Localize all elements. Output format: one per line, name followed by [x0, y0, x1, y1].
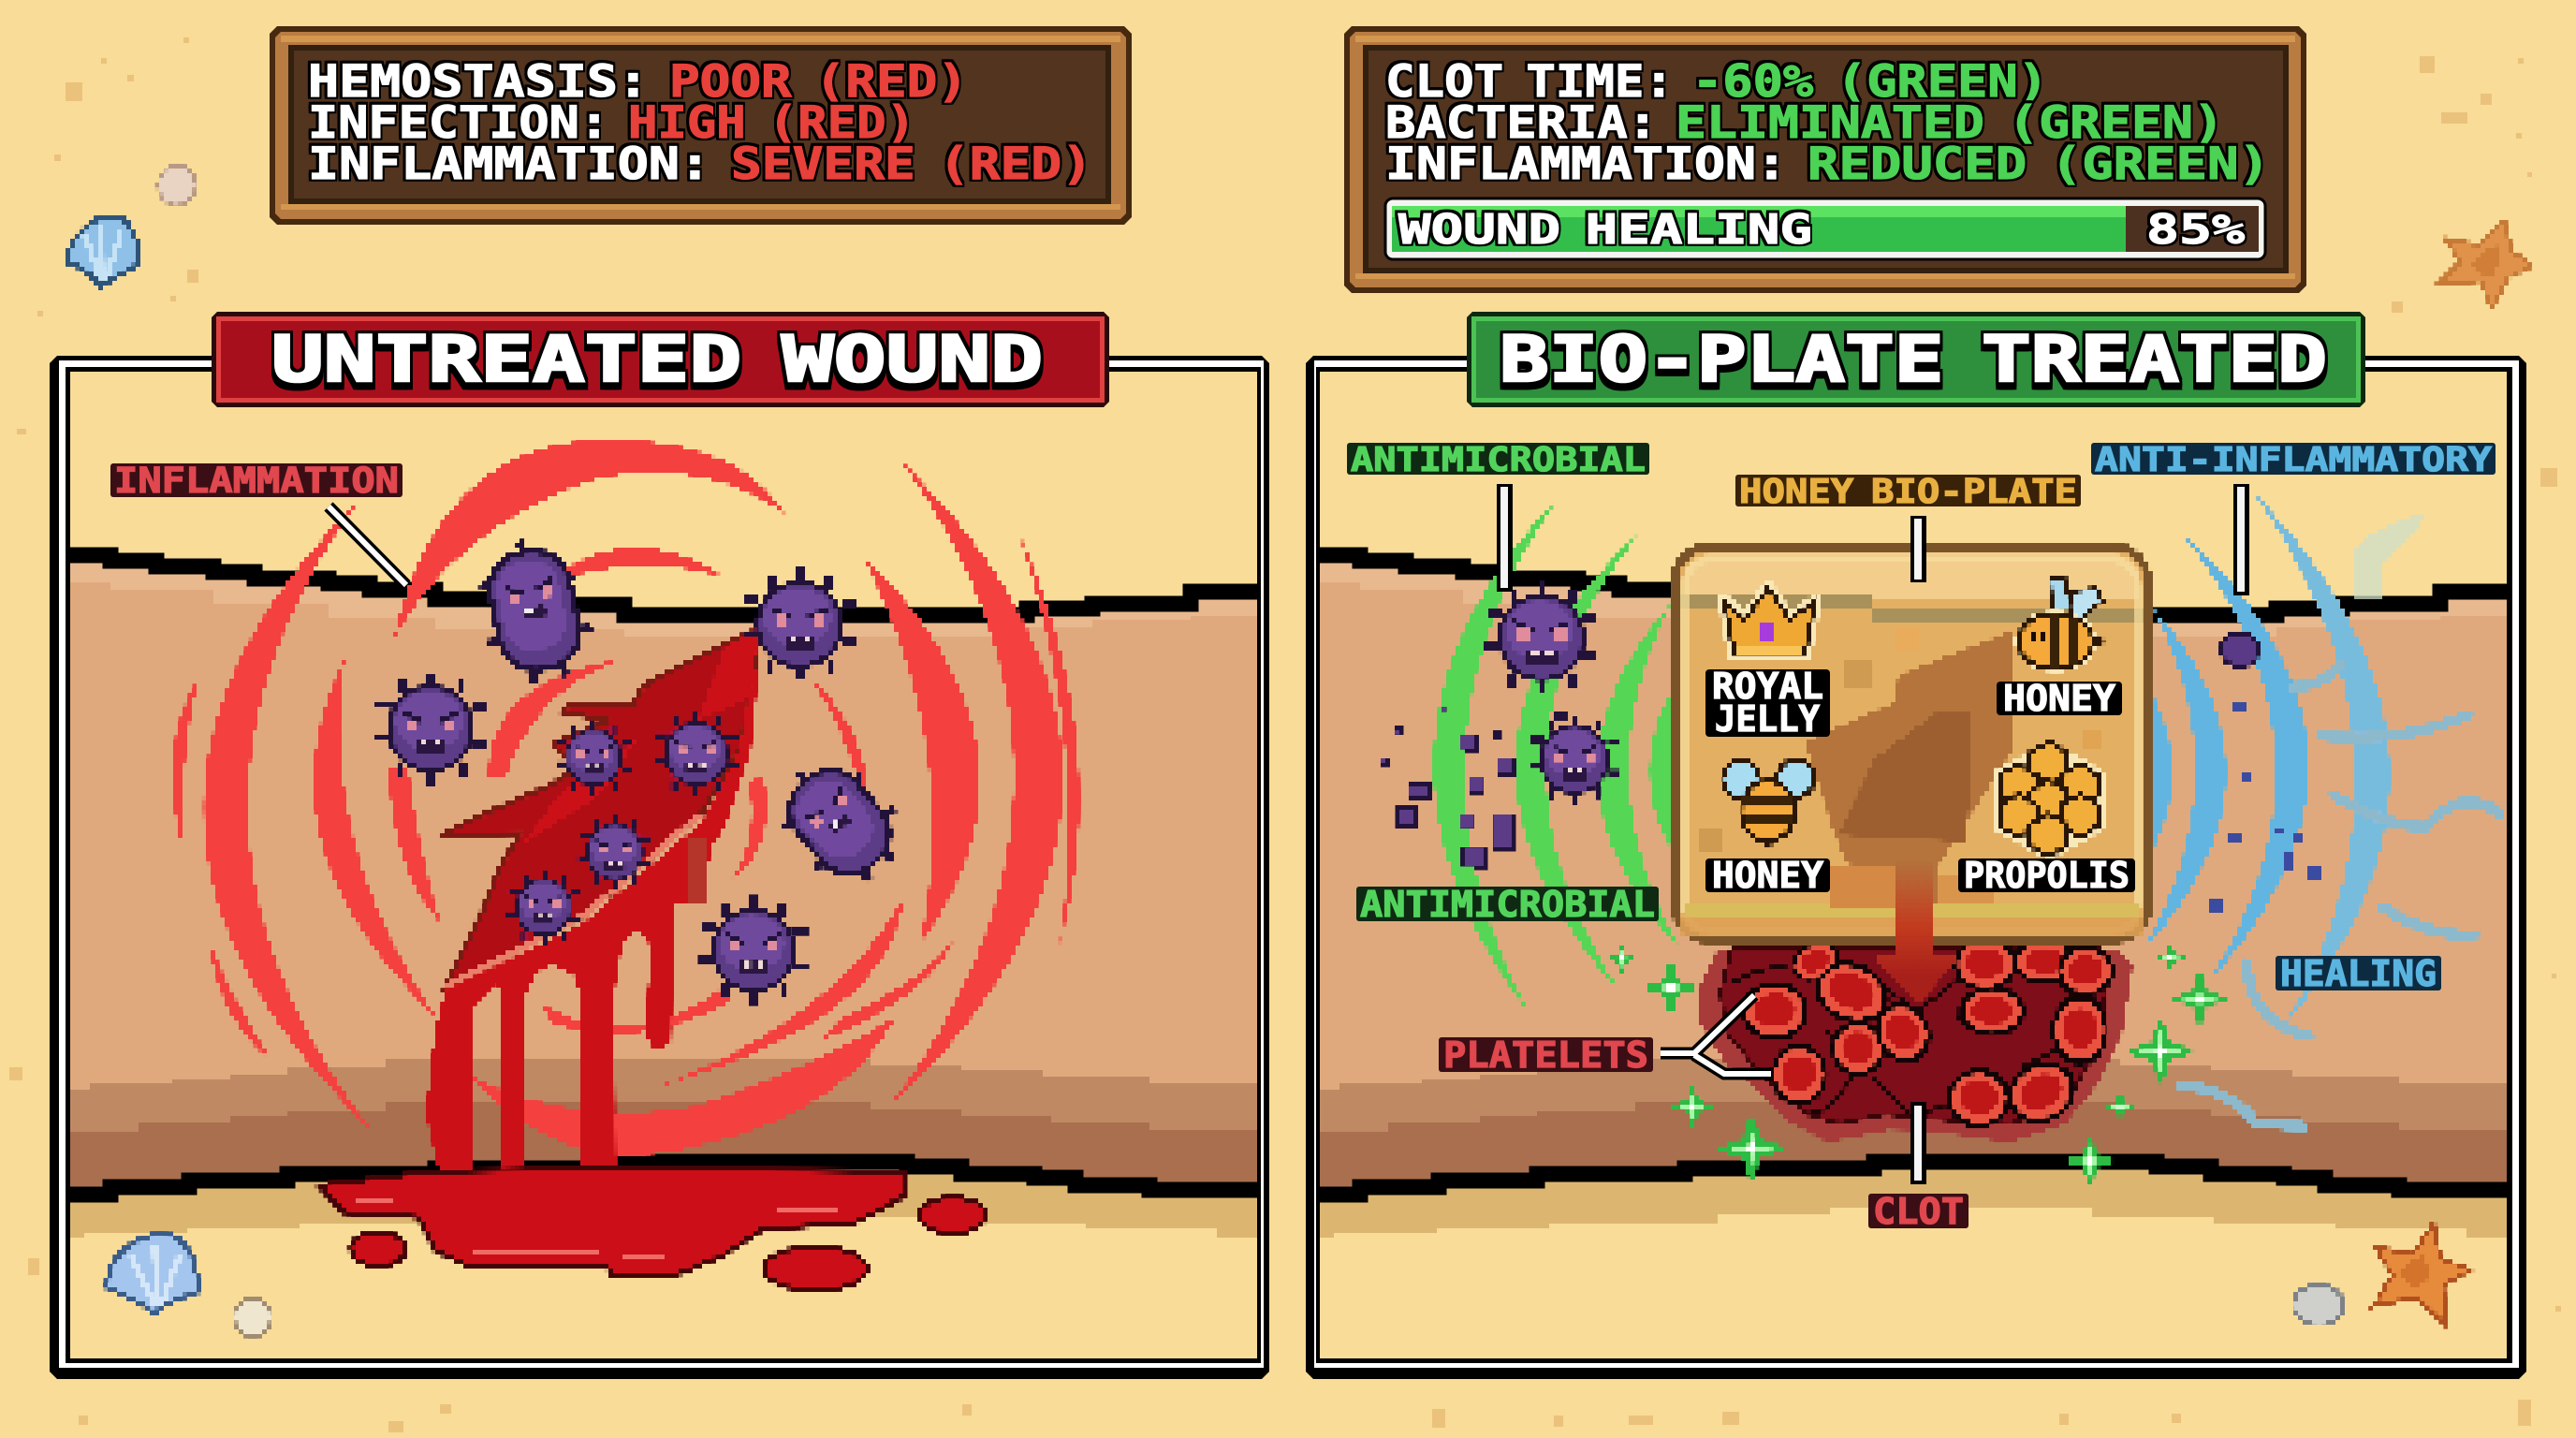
leader: inflammation inner	[329, 506, 406, 585]
stat line: hemostasis: HEMOSTASIS:	[308, 56, 649, 108]
label: clot: CLOT	[1873, 1191, 1964, 1232]
blue fragments	[2211, 704, 2321, 912]
label: antimicrobial bottom: ANTIMICROBIAL	[1360, 884, 1655, 925]
bacteria fragments	[1381, 707, 1567, 867]
stat line: inflammation	[1385, 139, 2270, 190]
label: honey bio-plate: HONEY BIO-PLATE	[1739, 473, 2077, 511]
leader: platelets	[1661, 995, 1771, 1074]
icon: starfish top right	[2437, 220, 2532, 307]
stat line: bacteria: ELIMINATED (GREEN)	[1676, 97, 2224, 149]
leader: top antimicrobial inner	[1500, 487, 1508, 588]
blood drops	[351, 1197, 986, 1290]
stat line: clot time: -60% (GREEN)	[1692, 56, 2048, 108]
panel: bio-plate treated stats	[1344, 26, 2306, 293]
icon: pebble bottom left	[234, 1299, 271, 1336]
skin cross-section: left	[70, 548, 1257, 1238]
label: propolis: PROPOLIS	[1964, 855, 2130, 896]
anti-inflammatory blue waves	[2144, 532, 2308, 981]
stat line: bacteria	[1385, 97, 2224, 149]
illustration: right panel art	[1381, 495, 2499, 1325]
label: royal jelly	[1705, 666, 1830, 740]
outer beach decorations	[67, 166, 2532, 307]
leader: clot	[1910, 1102, 1926, 1184]
panel: untreated wound frame	[50, 356, 1269, 1379]
leader: inflammation	[329, 506, 406, 585]
icon: propolis honeycomb	[1992, 740, 2106, 861]
label: antimicrobial top: ANTIMICROBIAL	[1351, 441, 1646, 479]
title banner: bio-plate treated: BIO-PLATE TREATED	[1500, 323, 2327, 397]
icon: pebble top left	[158, 166, 196, 205]
red blood cells	[1744, 937, 2112, 1131]
blood pool	[320, 1168, 903, 1276]
leader: anti-inflammatory	[2233, 484, 2249, 595]
title banner: untreated wound: UNTREATED WOUND	[271, 323, 1043, 397]
icon: blue shell top left	[67, 217, 139, 286]
leader: top antimicrobial	[1497, 484, 1513, 592]
wound healing progress bar	[1385, 198, 2265, 259]
label: royal jelly: ROYAL	[1712, 666, 1823, 707]
inflammation swirl rings	[172, 440, 1079, 1154]
healing blue wisps	[2181, 495, 2499, 1126]
stat line: hemostasis	[308, 56, 968, 108]
red arrow into clot	[1878, 858, 1955, 1004]
stat line: infection: INFECTION:	[308, 97, 609, 149]
illustration: left panel art	[107, 440, 1079, 1336]
label: honey left: HONEY	[1712, 855, 1823, 896]
label: royal jelly: JELLY	[1715, 698, 1820, 740]
stat line: clot time: CLOT TIME:	[1385, 56, 1674, 108]
antimicrobial green waves	[1434, 500, 1680, 1008]
icon: starfish bottom right	[2374, 1224, 2471, 1325]
stat line: bacteria: BACTERIA:	[1385, 97, 1658, 149]
icon: honey bee side view	[2014, 579, 2111, 672]
dark side drip	[686, 838, 705, 905]
healing sparkles	[1610, 946, 2224, 1183]
bacteria being destroyed	[1486, 581, 2259, 804]
icon: royal jelly crown	[1724, 588, 1815, 655]
wound healing progress bar: WOUND HEALING	[1398, 206, 1812, 254]
honey bio-plate	[1675, 547, 2148, 940]
wound gash	[442, 628, 760, 989]
stat line: inflammation: REDUCED (GREEN)	[1808, 139, 2270, 190]
stat line: clot time	[1385, 56, 2048, 108]
label: healing: HEALING	[2280, 953, 2437, 994]
icon: grey pebble bottom right	[2293, 1285, 2344, 1325]
wound healing progress bar: 85%	[2146, 206, 2246, 254]
icon: blue shell bottom left	[107, 1235, 198, 1313]
label: honey right: HONEY	[2003, 678, 2115, 719]
stat line: inflammation: INFLAMMATION:	[308, 139, 710, 190]
panel: bio-plate treated frame	[1306, 356, 2526, 1379]
bacteria	[374, 530, 919, 1005]
icon: honey bee top view	[1722, 760, 1814, 850]
leader: honey bio-plate	[1910, 516, 1926, 582]
panel: untreated wound stats	[270, 26, 1132, 225]
blood drips	[426, 655, 760, 1170]
title banner: bio-plate treated	[1467, 312, 2365, 407]
stat line: infection	[308, 97, 915, 149]
stat line: inflammation: INFLAMMATION:	[1385, 139, 1787, 190]
title banner: untreated wound	[212, 312, 1109, 407]
stat line: inflammation	[308, 139, 1092, 190]
stat line: infection: HIGH (RED)	[628, 97, 915, 149]
label: anti-inflammatory: ANTI-INFLAMMATORY	[2095, 441, 2492, 479]
stat line: hemostasis: POOR (RED)	[669, 56, 968, 108]
clot	[1698, 948, 2132, 1142]
label: platelets: PLATELETS	[1443, 1034, 1648, 1076]
skin cross-section: right	[1320, 548, 2507, 1238]
stat line: inflammation: SEVERE (RED)	[731, 139, 1092, 190]
label: inflammation: INFLAMMATION	[114, 461, 399, 501]
